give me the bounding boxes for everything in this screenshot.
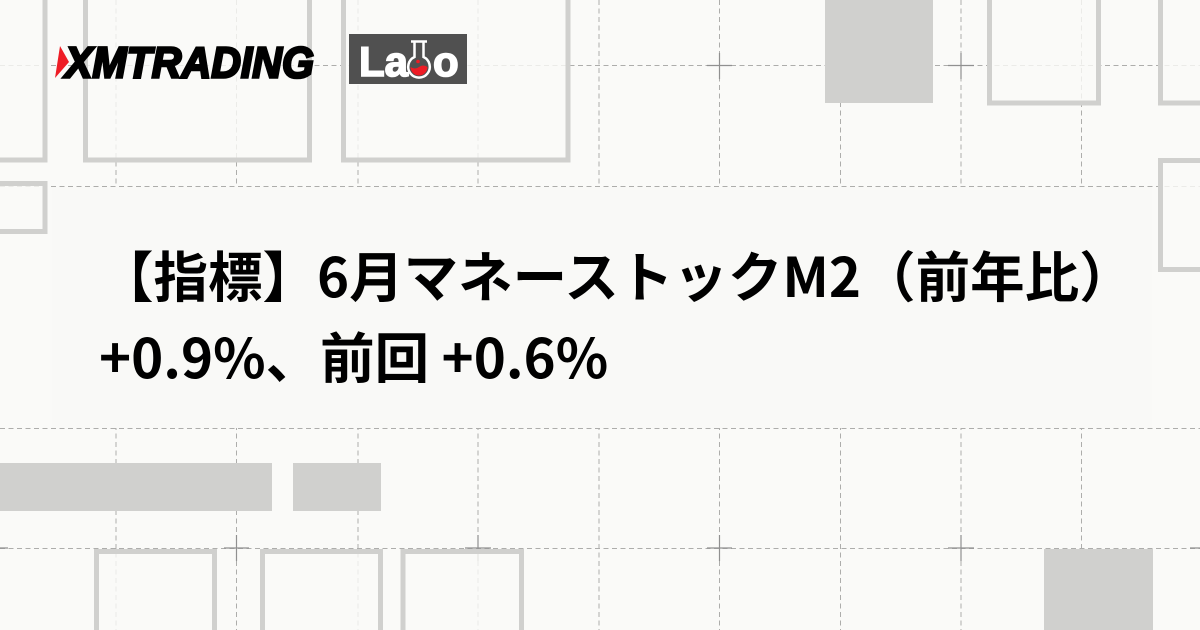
title panel (52, 187, 1152, 428)
logo: Labo (349, 34, 467, 85)
title: +0.9%、前回 +0.6% (99, 315, 608, 394)
title: 【指標】6月マネーストックM2（前年比） (99, 234, 1134, 313)
logo: XMTRADING: XMTRADING (62, 38, 314, 88)
logo: Labo: o (433, 38, 459, 85)
title (99, 234, 1134, 394)
icon: flask (408, 42, 430, 78)
logo: Labo: La (359, 38, 409, 85)
